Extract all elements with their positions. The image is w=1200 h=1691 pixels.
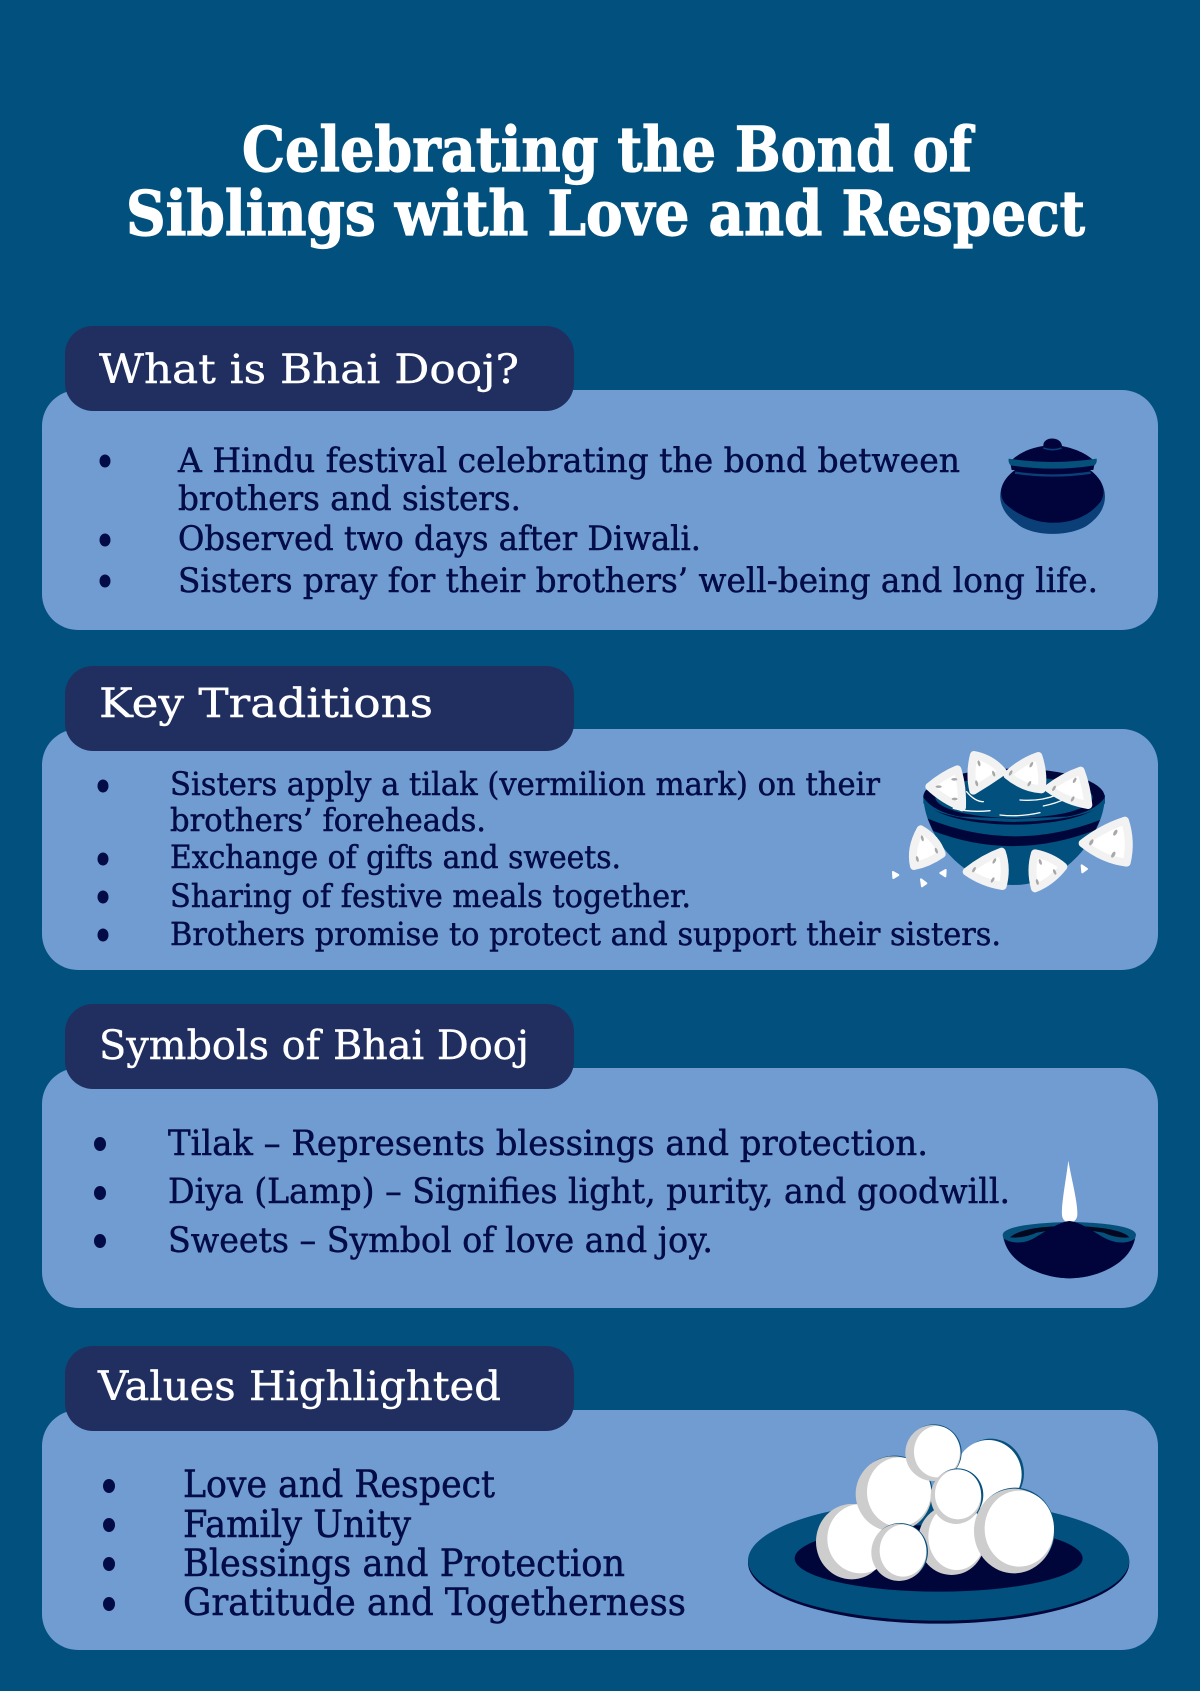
bullet list: what is Bhai Dooj: A Hindu festival celebrating the bond between [177, 441, 960, 481]
icon: plate of laddoos [748, 1424, 1129, 1624]
title [126, 113, 1085, 250]
bullet list: symbols: Sweets – Symbol of love and joy. [168, 1221, 713, 1261]
bullet list: key traditions: Brothers promise to protect and support their sisters. [170, 915, 1001, 953]
bullet list: values [103, 1463, 686, 1624]
bullet list: what is Bhai Dooj: Sisters pray for their brothers’ well-being and long life. [178, 561, 1098, 601]
heading: Symbols of Bhai Dooj [65, 1004, 574, 1089]
heading: Key Traditions: Key Traditions [99, 681, 433, 727]
title: Celebrating the Bond of [242, 113, 975, 186]
bullet list: what is Bhai Dooj: Observed two days after Diwali. [178, 519, 701, 559]
bullet list: symbols: Tilak – Represents blessings and protection. [168, 1124, 928, 1164]
bullet list: what is Bhai Dooj [100, 441, 1098, 601]
bullet list: values: Gratitude and Togetherness [183, 1581, 686, 1624]
bullet list: what is Bhai Dooj: brothers and sisters. [178, 479, 521, 519]
heading: What is Bhai Dooj? [65, 326, 574, 411]
bullet list: key traditions: brothers’ foreheads. [170, 801, 486, 839]
bullet list: key traditions: Sharing of festive meals together. [170, 877, 691, 915]
bullet list: key traditions [98, 765, 1001, 953]
heading: Symbols of Bhai Dooj: Symbols of Bhai Dooj [99, 1023, 529, 1069]
bullet list: symbols [94, 1124, 1010, 1261]
bullet list: key traditions: Exchange of gifts and sweets. [170, 838, 621, 876]
bullet list: values: Blessings and Protection [183, 1542, 625, 1585]
heading: Values Highlighted [65, 1346, 574, 1431]
panel: Key Traditions [42, 666, 1158, 970]
heading: Key Traditions [65, 666, 574, 751]
bullet list: values: Love and Respect [183, 1463, 495, 1506]
panel: Values Highlighted [42, 1346, 1158, 1650]
panel: What is Bhai Dooj? [42, 326, 1158, 630]
icon: bowl of sweets [893, 755, 1129, 888]
bullet list: key traditions: Sisters apply a tilak (vermilion mark) on their [170, 765, 881, 803]
icon: clay pot [1000, 438, 1105, 534]
title: Siblings with Love and Respect [126, 177, 1085, 250]
bullet list: symbols: Diya (Lamp) – Signifies light, purity, and goodwill. [168, 1172, 1010, 1212]
bullet list: values: Family Unity [183, 1503, 411, 1546]
heading: Values Highlighted: Values Highlighted [97, 1364, 501, 1410]
heading: What is Bhai Dooj?: What is Bhai Dooj? [99, 347, 519, 393]
panel: Symbols of Bhai Dooj [42, 1004, 1158, 1308]
icon: diya lamp [1003, 1161, 1136, 1278]
